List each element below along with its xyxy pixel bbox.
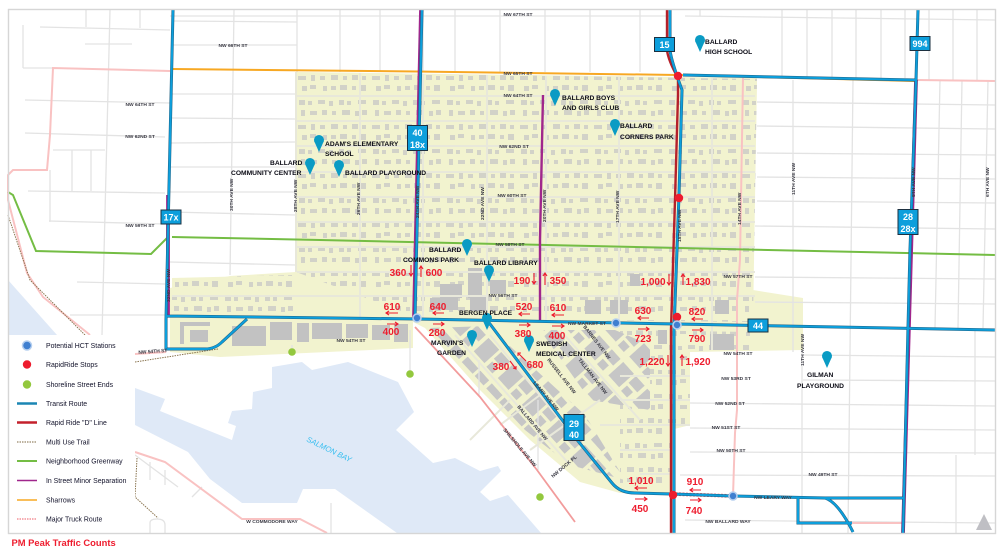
traffic counts: 740 [686,506,703,517]
traffic counts: 360 [390,268,407,279]
street labels: NW 51ST ST [712,425,740,431]
street labels: 26TH AVE NW [356,182,362,215]
street labels: 20TH AVE NW [542,189,548,222]
landmark labels: BERGEN PLACE [459,310,513,317]
landmark labels: HIGH SCHOOL [705,49,752,56]
street labels: 8TH AVE NW [911,167,917,197]
landmark labels: BALLARD BOYS [562,95,616,102]
street labels: 17TH AVE NW [615,190,621,223]
traffic counts: 380 [493,362,510,373]
traffic counts: 400 [383,327,400,338]
route badge 994: 994 [912,39,928,49]
street labels: BALLARD AVE NW [515,404,549,442]
landmark labels: COMMONS PARK [403,257,459,264]
landmark labels: BALLARD [270,160,302,167]
street labels: NW 54TH ST [138,348,168,356]
route badge 40/18x [408,126,428,150]
traffic counts: 1,830 [685,277,711,288]
land: study area [170,72,803,494]
Rapid Ride pink dashes [672,494,733,496]
street labels: NW 64TH ST [503,93,533,99]
street labels: 24TH AVE NW [415,185,421,218]
traffic counts: 520 [516,302,533,313]
street labels: LEARY AVE NW [531,380,560,413]
in street minor separation [168,10,916,533]
traffic counts: 610 [384,302,401,313]
street labels: NW 58TH ST [495,242,525,248]
route badge 15: 15 [659,40,670,50]
route badge 44 [748,319,768,332]
industrial buildings [180,268,734,350]
street labels: NW 62ND ST [499,144,529,150]
legend item: RapidRide stops: RapidRide Stops [46,362,98,369]
landmark labels [231,39,844,390]
traffic counts: 1,010 [628,476,654,487]
legend item: potential HCT stations [22,341,116,350]
traffic counts: 400 [549,331,566,342]
street labels: NW 54TH ST [336,338,366,344]
legend item: transit route [17,401,87,408]
street labels: TALLMAN AVE NW [576,358,608,396]
street labels: 22ND AVE NW [480,187,486,220]
traffic counts: 1,920 [685,357,711,368]
sharrows [173,69,915,81]
street labels: 28TH AVE NW [293,179,299,212]
street labels: NW DOCK PL [550,455,578,480]
traffic counts: 910 [687,477,704,488]
landmark labels: BALLARD [705,39,737,46]
street labels: NW 67TH ST [503,12,533,18]
route badge 28/28x [898,210,918,234]
street labels: NW 49TH ST [808,472,838,478]
street labels: NW 57TH ST [723,274,753,280]
traffic counts: 600 [426,268,443,279]
street labels: 11TH AVE NW [800,334,806,366]
traffic counts: 820 [689,307,706,318]
route badge 40/18x: 40 [412,128,423,138]
route badge 40/18x: 18x [410,140,425,150]
traffic counts: 790 [689,334,706,345]
landmark labels: BALLARD [429,247,461,254]
legend item: rapid ride D line [17,420,107,427]
landmark pins [305,35,832,368]
traffic counts: 723 [635,334,652,345]
legend item: RapidRide stops [23,360,98,369]
street labels: 15TH AVE NW [677,209,683,242]
street labels: NW 54TH ST [723,351,753,357]
Rapid Ride D line [667,10,678,533]
traffic counts: 450 [632,504,649,515]
street labels: NW 50TH ST [716,448,746,454]
traffic counts: 280 [429,328,446,339]
landmark labels: ADAM'S ELEMENTARY [325,141,399,148]
landmark labels: AND GIRLS CLUB [562,105,619,112]
route badge 28/28x: 28x [900,224,916,234]
water: Salmon Bay [8,280,541,533]
street labels: NW LEARY WAY [754,495,793,501]
traffic counts: 680 [527,360,544,371]
legend item: sharrows: Sharrows [46,498,76,504]
landmark labels: COMMUNITY CENTER [231,170,302,177]
street labels: NW 66TH ST [218,43,248,49]
street labels: NW 56TH ST [488,293,518,299]
street labels: W COMMODORE WAY [246,519,298,525]
landmark labels: BALLARD [620,123,652,130]
route badge 29/40: 40 [569,430,579,440]
street labels: 11TH AVE NW [791,163,797,195]
traffic counts: 1,220 [639,357,665,368]
waterfront building blocks [430,326,625,480]
landmark labels: BALLARD LIBRARY [474,260,538,267]
street labels [125,12,991,525]
legend item: multi use trail [17,440,90,446]
street labels: 30TH AVE NW [229,178,235,211]
traffic counts: 1,000 [640,277,666,288]
landmark labels: CORNERS PARK [620,134,674,141]
legend [13,335,135,532]
traffic counts: 610 [550,303,567,314]
streets inside study area [172,72,755,480]
transit routes [165,10,995,533]
street labels: NW 62ND ST [125,134,155,140]
route badge 17x: 17x [163,212,179,222]
landmark labels: SCHOOL [325,151,354,158]
route badge 17x [161,210,181,224]
route badge 15 [654,38,674,52]
legend item: major truck route [17,516,102,524]
street labels: NW BALLARD WAY [705,519,751,525]
route badge 44: 44 [753,321,763,331]
traffic counts: 630 [635,306,652,317]
street labels: BARNES AVE NW [581,325,612,361]
street labels: NW MARKET ST [568,321,606,327]
landmark labels: PLAYGROUND [797,383,844,390]
route badge 28/28x: 28 [903,212,913,222]
legend item: transit route: Transit Route [46,401,87,408]
legend item: sharrows [17,498,76,504]
street labels: 6TH AVE NW [985,167,991,197]
legend item: major truck route: Major Truck Route [46,516,102,524]
traffic counts: 190 [514,276,531,287]
traffic counts: 350 [550,276,567,287]
neighborhood greenway [8,192,995,255]
legend item: in street minor separation: In Street Minor Separation [46,478,127,485]
street labels: NW 65TH ST [503,71,533,77]
route badge 994 [910,36,930,50]
water label: SALMON BAY [305,435,354,465]
north arrow [976,514,992,530]
landmark labels: GILMAN [807,372,834,379]
street labels: NW 52ND ST [715,401,745,407]
traffic direction arrows [386,265,703,502]
legend item: potential HCT stations: Potential HCT Stations [46,343,116,350]
RapidRide stops [669,72,683,499]
route badge 29/40 [564,414,584,440]
landmark labels: GARDEN [437,350,466,357]
street labels: 32ND AVE NW [166,269,172,302]
truck route along Shilshole [415,327,575,522]
street labels: RUSSELL AVE NW [545,358,577,396]
landmark labels: BALLARD PLAYGROUND [345,170,426,177]
legend item: shoreline street ends: Shoreline Street Ends [46,382,114,389]
street labels: NW 64TH ST [125,102,155,108]
title: PM Peak Traffic Counts: PM Peak Traffic Counts [12,537,116,548]
multi use trail [8,215,218,518]
street labels: SHILSHOLE AVE NW [501,427,537,469]
landmark labels: SWEDISH [536,341,567,348]
traffic counts: 640 [430,302,447,313]
shoreline street ends [288,348,544,501]
landmark labels: MARVIN'S [431,340,464,347]
street labels: NW 59TH ST [125,223,155,229]
street labels: NW 60TH ST [497,193,527,199]
legend item: rapid ride D line: Rapid Ride "D" Line [46,420,107,427]
traffic counts: 380 [515,329,532,340]
landmark labels: MEDICAL CENTER [536,351,596,358]
route badge 29/40: 29 [569,419,579,429]
street labels: 14TH AVE NW [737,192,743,225]
traffic counts [383,268,711,517]
street labels: NW 53RD ST [721,376,751,382]
legend item: neighborhood greenway: Neighborhood Greenway [46,458,123,466]
potential HCT stations [413,314,737,500]
legend item: multi use trail: Multi Use Trail [46,440,90,446]
legend item: shoreline street ends [23,380,114,389]
